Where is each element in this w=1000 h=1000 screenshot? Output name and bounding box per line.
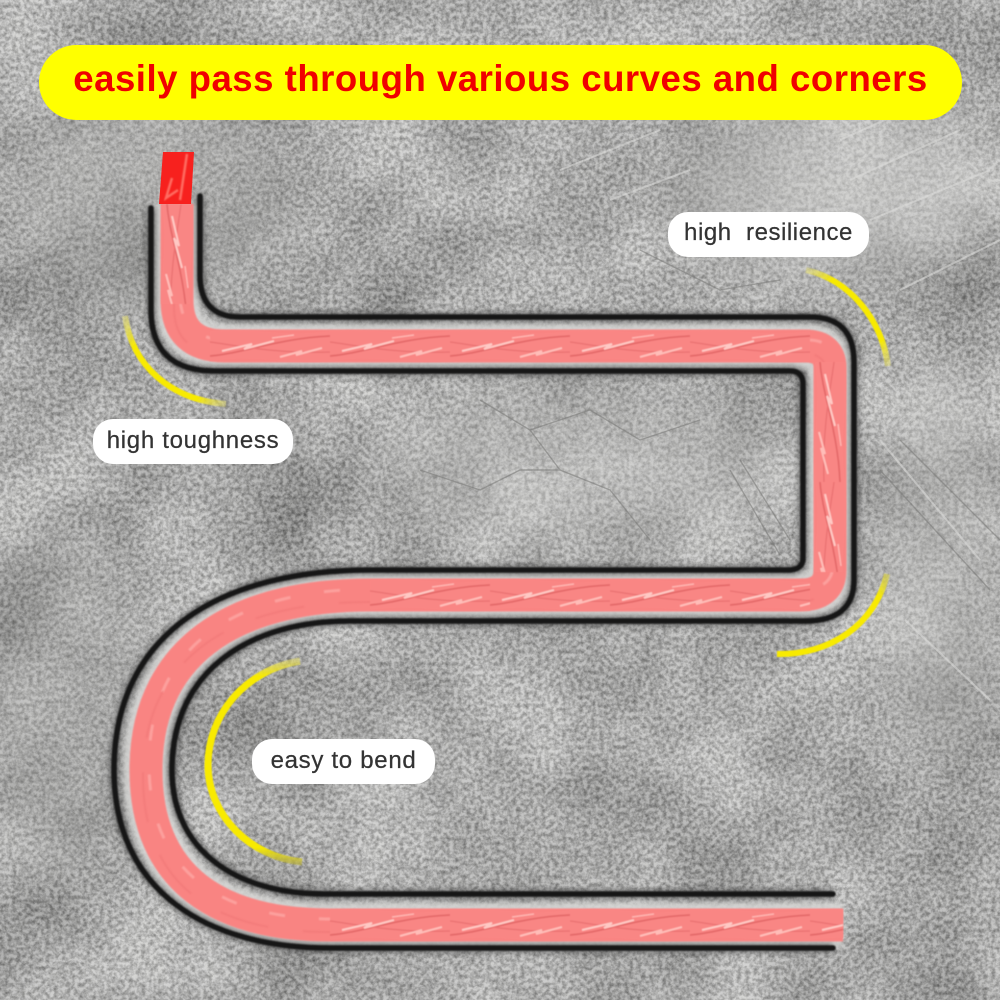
- rope exposed red tip: [159, 152, 194, 204]
- yellow arc: easy to bend: [208, 661, 302, 862]
- label: easy to bend: easy to bend: [271, 747, 416, 774]
- yellow arc: high toughness: [125, 316, 226, 404]
- label: high resilience: [668, 212, 869, 257]
- rope body: [143, 198, 847, 942]
- label: high resilience: high resilience: [684, 219, 853, 246]
- channel inner light area: [146, 204, 843, 925]
- label: high toughness: high toughness: [107, 427, 279, 454]
- channel shadow halo: [114, 196, 854, 948]
- yellow arc: high resilience: [806, 270, 888, 366]
- title banner: easily pass through various curves and corners: [73, 58, 928, 99]
- channel black outline: [114, 196, 854, 948]
- yellow arc: lower right corner: [777, 574, 887, 654]
- title banner: [39, 45, 962, 120]
- label: easy to bend: [252, 739, 435, 784]
- label: high toughness: [93, 419, 293, 464]
